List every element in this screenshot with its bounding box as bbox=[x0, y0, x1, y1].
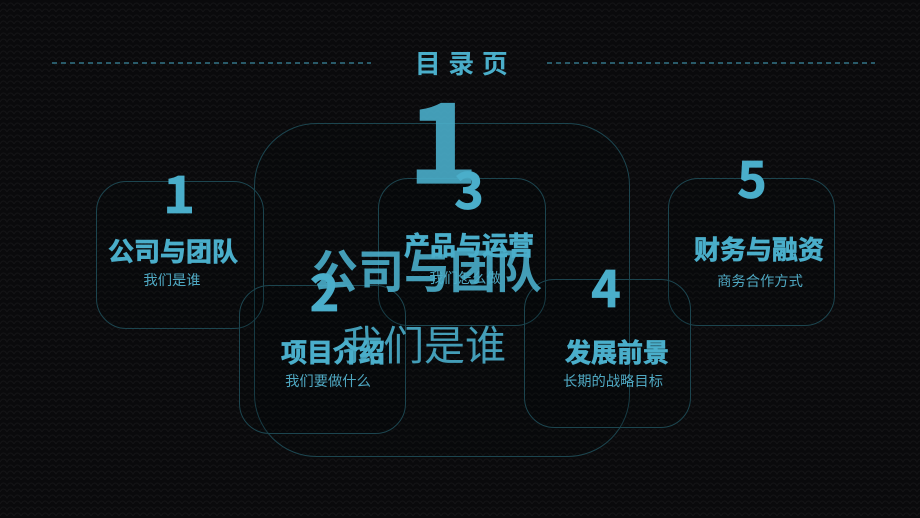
number 5: 5 bbox=[737, 141, 767, 213]
subtitle: business cooperation: 商务合作方式 bbox=[717, 273, 803, 290]
heading: development outlook: 发展前景 bbox=[565, 338, 669, 368]
subtitle: long-term strategic goals: 长期的战略目标 bbox=[563, 373, 663, 390]
panel: item 3 product and operations bbox=[378, 152, 546, 326]
heading: finance and funding: 财务与融资 bbox=[694, 235, 824, 265]
panel: item 2 project introduction bbox=[240, 254, 406, 434]
large subtitle: who we are: 我们是谁 bbox=[342, 323, 506, 369]
subtitle: how we do it: 我们怎么做 bbox=[429, 270, 501, 287]
subtitle: who we are: 我们是谁 bbox=[143, 272, 201, 289]
number 1: 1 bbox=[163, 155, 195, 227]
panel: item 1 company and team bbox=[96, 155, 264, 328]
panel: large highlighted card outline bbox=[254, 124, 630, 456]
header divider: left dashed line bbox=[52, 62, 371, 64]
header divider: right dashed line bbox=[547, 62, 875, 64]
large heading: company and team: 公司与团队 bbox=[312, 246, 542, 298]
heading: company and team: 公司与团队 bbox=[108, 237, 238, 267]
panel: item 5 finance and funding bbox=[668, 141, 834, 326]
number 2: 2 bbox=[310, 254, 339, 326]
number 4: 4 bbox=[591, 250, 621, 322]
heading: project introduction: 项目介绍 bbox=[281, 338, 385, 368]
subtitle: what we want to do: 我们要做什么 bbox=[285, 373, 371, 390]
number 3: 3 bbox=[454, 152, 484, 224]
overlay: highlighted large item bbox=[312, 58, 542, 369]
panel: item 4 development outlook bbox=[524, 250, 690, 428]
heading: product and operations: 产品与运营 bbox=[404, 231, 534, 261]
large number 1: 1 bbox=[408, 58, 478, 214]
title: 目录页 bbox=[415, 49, 515, 79]
